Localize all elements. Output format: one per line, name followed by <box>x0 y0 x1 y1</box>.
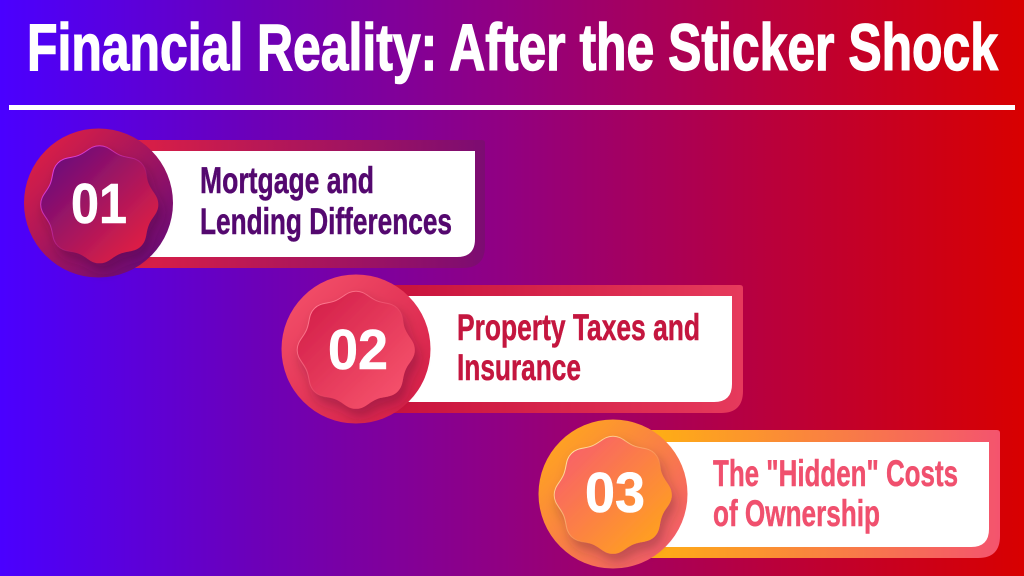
number badge 03: 03 <box>585 461 645 525</box>
card frame 01 <box>130 140 485 268</box>
number badge 02: 02 <box>328 318 388 382</box>
number badge 01 <box>24 128 173 278</box>
label 01: Lending Differences <box>200 201 452 242</box>
label 02: Property Taxes and <box>457 307 700 348</box>
label 03: of Ownership <box>713 493 880 534</box>
panel: item 01 <box>24 128 485 278</box>
title underline <box>9 105 1015 110</box>
label 02: Insurance <box>457 347 581 388</box>
card body 03 <box>645 442 989 547</box>
card body 01 <box>130 151 475 257</box>
panel: item 03 <box>538 420 1000 568</box>
card body 02 <box>388 296 732 402</box>
number badge 03 <box>538 420 688 568</box>
number badge 02 <box>282 274 430 424</box>
card frame 03 <box>645 430 1000 558</box>
label 01: Mortgage and <box>200 160 374 201</box>
card frame 02 <box>388 285 743 413</box>
panel: item 02 <box>282 274 743 424</box>
number badge 01: 01 <box>71 172 127 236</box>
